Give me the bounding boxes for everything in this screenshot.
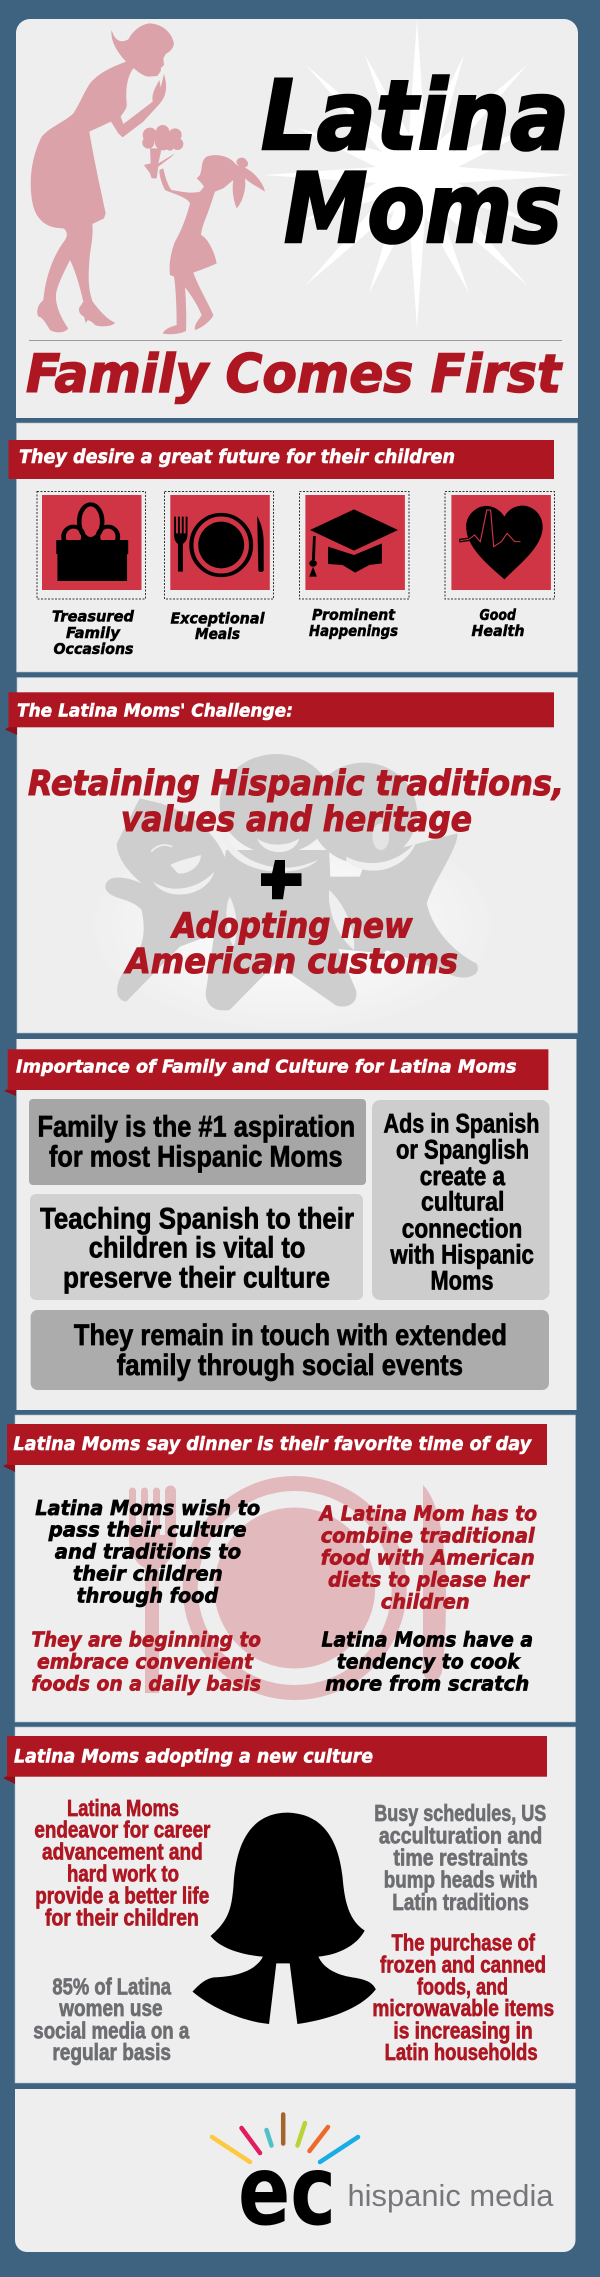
text: retaining traditions: Retaining Hispanic traditions, [28,764,564,804]
text: frozen and canned foods [372,1930,554,2065]
text: combine traditional food: children [381,1590,470,1614]
icon: woman silhouette [192,1813,376,2024]
text: cook from scratch: tendency to cook [337,1650,521,1674]
label: Treasured Family Occasions: Treasured [52,608,135,626]
panel: dinner [3,1415,576,1722]
label: Good Health [472,606,524,640]
text: social media statistic: regular basis [52,2039,171,2065]
label: Exceptional Meals [170,610,265,643]
banner: They desire a great future: They desire a great future for their children [19,447,455,468]
text: pass their culture [35,1496,260,1608]
icon: heart with pulse [445,492,554,599]
heading: Family Comes First: Family Comes First [26,344,563,405]
text: social media statistic [33,1973,189,2065]
box: number one aspiration [29,1099,366,1185]
banner: Importance of Family and Culture: Importance of Family and Culture for Latina Moms [16,1057,517,1078]
text: career advancement: provide a better life [35,1882,209,1908]
panel: importance of family and culture [4,1039,576,1410]
text: busy schedules: time restraints [393,1845,528,1871]
box: extended family: They remain in touch with extended [74,1319,507,1352]
text: combine traditional food: A Latina Mom has to [318,1502,537,1526]
text: social media statistic: women use [58,1995,163,2021]
text: career advancement: hard work to [67,1861,179,1887]
panel: title [16,19,578,418]
icon: plate, fork and knife watermark [129,1484,446,1693]
banner: The Latina Moms' Challenge [5,692,554,735]
heading: Latina Moms [261,60,569,265]
banner: dinner favorite time [3,1424,547,1472]
text: convenient foods: embrace convenient [37,1650,254,1674]
text: combine traditional food: diets to please her [328,1568,531,1592]
text: busy schedules: acculturation and [379,1822,542,1848]
text: frozen and canned foods: microwavable items [372,1995,554,2021]
logo: ec: ec [238,2135,336,2247]
text: combine traditional food: combine traditional [321,1524,536,1548]
label: Prominent Happenings [309,606,398,640]
box: ads in Spanish: Ads in Spanish [384,1109,540,1139]
text: adopting customs: American customs [123,942,458,982]
text: frozen and canned foods: The purchase of [392,1930,535,1956]
banner: adopting a new culture: Latina Moms adopting a new culture [14,1746,373,1768]
label: Treasured Family Occasions [52,608,135,658]
text: frozen and canned foods: Latin households [385,2039,538,2065]
box: ads in Spanish: connection [402,1213,522,1243]
panel: great future [8,423,578,672]
box: number one aspiration: for most Hispanic Moms [49,1141,342,1174]
text: social media statistic: social media on a [33,2017,189,2043]
label: Prominent Happenings: Prominent [312,606,396,624]
box: ads in Spanish: cultural [421,1187,504,1217]
box: ads in Spanish: or Spanglish [396,1134,529,1164]
banner: They desire a great future [8,440,554,479]
text: career advancement: Latina Moms [67,1795,179,1821]
logo: hispanic media: hispanic media [348,2178,554,2213]
icon: white starburst [264,20,572,328]
text: retaining traditions [28,764,564,840]
text: pass their culture: through food [76,1584,218,1608]
text: convenient foods: They are beginning to [31,1628,261,1652]
box: ads in Spanish [372,1100,550,1300]
label: Exceptional Meals: Exceptional [170,610,265,628]
text: pass their culture: pass their culture [48,1518,247,1542]
label: Good Health: Good [480,606,517,624]
label: Treasured Family Occasions: Family [66,624,121,642]
banner: adopting a new culture [3,1736,547,1784]
box: teaching Spanish [30,1194,363,1300]
icon: plate and cutlery [164,492,274,599]
text: combine traditional food [318,1502,537,1614]
heading: Latina Moms: Moms [284,153,562,265]
icon: three gingerbread figures [105,754,478,1011]
text: frozen and canned foods: frozen and canned [380,1951,546,1977]
banner: The Latina Moms' Challenge: The Latina Moms' Challenge: [17,701,293,722]
text: cook from scratch: Latina Moms have a [322,1628,533,1652]
banner: Importance of Family and Culture [4,1049,548,1096]
icon: plus sign [261,860,302,899]
text: cook from scratch [322,1628,533,1696]
text: pass their culture: and traditions to [55,1540,241,1564]
text: career advancement [34,1795,210,1931]
text: pass their culture: Latina Moms wish to [35,1496,260,1520]
text: busy schedules: bump heads with [384,1866,538,1892]
box: extended family: family through social events [117,1349,463,1382]
text: frozen and canned foods: is increasing in [393,2017,533,2043]
text: busy schedules: Latin traditions [392,1889,529,1915]
text: convenient foods: foods on a daily basis [31,1672,261,1696]
text: career advancement: advancement and [42,1838,203,1864]
box: teaching Spanish: children is vital to [89,1232,305,1265]
box: teaching Spanish: Teaching Spanish to their [40,1202,354,1235]
banner: dinner favorite time: Latina Moms say dinner is their favorite time of day [13,1433,533,1455]
text: convenient foods [31,1628,261,1696]
panel: logo footer [15,2089,576,2252]
text: retaining traditions: values and heritage [121,800,472,840]
heading: Latina Moms: Latina [261,60,569,172]
text: social media statistic: 85% of Latina [52,1973,171,1999]
icon: graduation cap [300,492,409,599]
panel: adopting a new culture [3,1727,576,2083]
box: number one aspiration: Family is the #1 aspiration [38,1111,355,1144]
box: extended family [31,1310,549,1390]
text: combine traditional food: food with American [321,1546,535,1570]
text: career advancement: endeavor for career [34,1817,210,1843]
icon: mother and daughter silhouette [31,23,265,334]
box: ads in Spanish: create a [420,1161,506,1191]
panel: the challenge [5,678,578,1033]
label: Treasured Family Occasions: Occasions [54,640,134,658]
label: Good Health: Health [472,622,524,640]
label: Prominent Happenings: Happenings [309,622,398,640]
icon: coloured rays [212,2114,358,2162]
text: busy schedules: Busy schedules, US [374,1800,546,1826]
text: frozen and canned foods: foods, and [417,1973,508,1999]
box: ads in Spanish: with Hispanic [390,1239,534,1269]
box: ads in Spanish: Moms [430,1265,494,1295]
icon: gift box [37,492,146,599]
text: adopting customs [123,907,458,982]
text: pass their culture: their children [73,1562,223,1586]
text: cook from scratch: more from scratch [325,1672,529,1696]
label: Exceptional Meals: Meals [195,625,240,643]
text: career advancement: for their children [45,1905,199,1931]
box: teaching Spanish: preserve their culture [63,1262,330,1295]
text: adopting customs: Adopting new [170,907,413,947]
text: busy schedules [374,1800,546,1915]
